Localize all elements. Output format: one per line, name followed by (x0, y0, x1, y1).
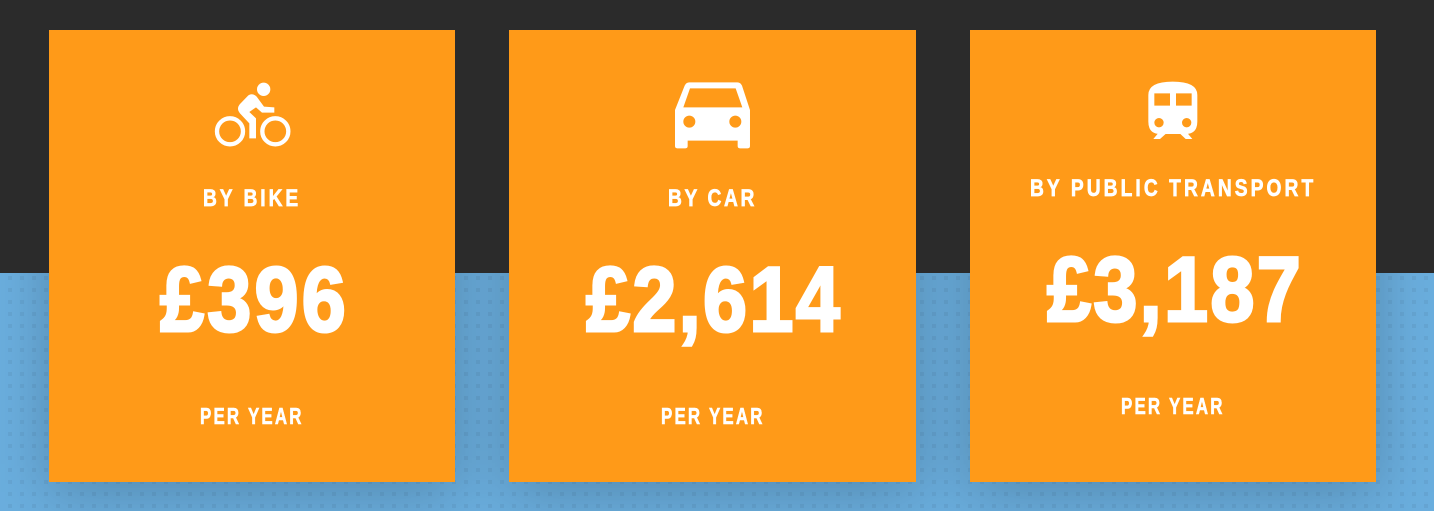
label: by public transport: BY PUBLIC TRANSPORT (1030, 174, 1314, 202)
label: by car: BY CAR (668, 184, 755, 212)
label: per year: PER YEAR (1121, 393, 1223, 420)
label: per year: PER YEAR (661, 403, 763, 430)
dark top background (0, 0, 1434, 273)
label: per year: PER YEAR (200, 403, 302, 430)
icon: bicycle (217, 83, 288, 144)
label: by bike: BY BIKE (203, 184, 298, 212)
icon: car (675, 82, 750, 148)
panel: by car (509, 30, 916, 482)
amount: £2,614: £2,614 (586, 248, 840, 351)
blue bottom background (0, 273, 1434, 511)
amount: £3,187: £3,187 (1047, 238, 1301, 341)
icon: train (1148, 82, 1197, 139)
panel: by public transport (970, 30, 1376, 482)
panel: by bike (49, 30, 455, 482)
amount: £396: £396 (160, 248, 346, 351)
